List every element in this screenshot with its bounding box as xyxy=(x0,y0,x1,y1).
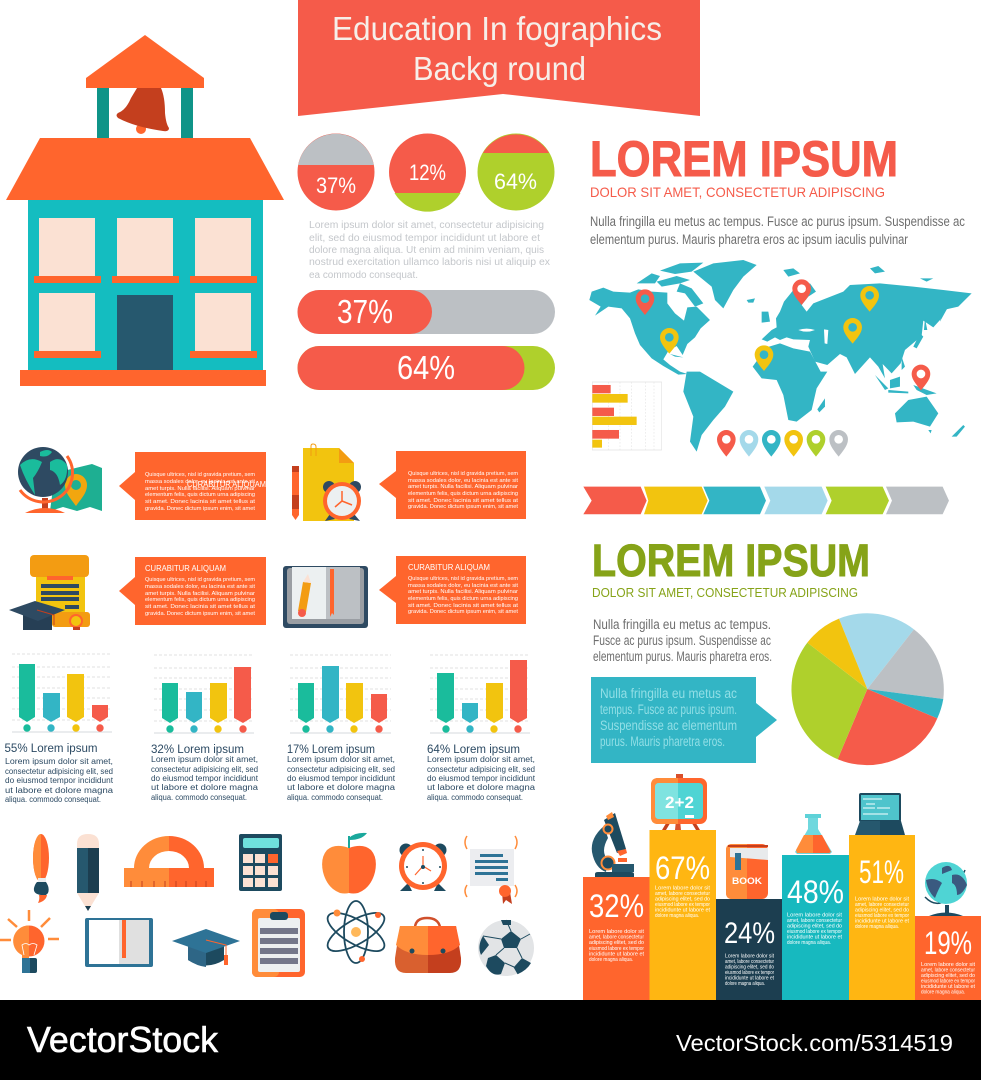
icon: calculator xyxy=(239,834,282,891)
icon: desk globe xyxy=(925,862,967,916)
icon: open notebook with pencil xyxy=(283,566,368,628)
footer: watermark bar: VectorStock xyxy=(27,1019,219,1060)
text block: pie intro: elementum purus. Mauris pharetra eros. xyxy=(593,649,772,664)
caption: 55% lorem ipsum: Lorem ipsum dolor sit amet, xyxy=(5,757,113,766)
callout: curabitur 3: CURABITUR ALIQUAM xyxy=(145,563,226,573)
caption: 55% lorem ipsum: 55% Lorem ipsum xyxy=(4,743,98,755)
callout: curabitur 2: Quisque ultrices, nisl id gravida pretium, sem xyxy=(408,471,518,477)
column stat 19%: incididunte ut labore et xyxy=(921,984,975,990)
text block: lorem paragraph: nostrud exercitation ullamco laboris nisi ut aliquip ex xyxy=(309,257,550,268)
column stat 24%: eiusmod labore ex tempor xyxy=(725,970,774,976)
icon: microscope xyxy=(592,812,634,877)
callout: curabitur 1: massa sodales dolor, eu lacinia est ante sit xyxy=(145,479,255,485)
column stat 32% xyxy=(583,877,650,1000)
icon: school bag xyxy=(395,918,461,973)
icon: laptop xyxy=(855,793,905,835)
icon: flask xyxy=(795,814,832,854)
title banner xyxy=(298,0,700,116)
heading: lorem ipsum red: DOLOR SIT AMET, CONSECTETUR ADIPISCING xyxy=(590,184,885,200)
column stat 24%: incididunte ut labore et xyxy=(725,976,774,982)
circle stat 12% xyxy=(389,134,466,212)
caption: 64% lorem ipsum: aliqua. commodo consequat. xyxy=(427,793,523,802)
column stat 19%: dolore magna aliqua. xyxy=(921,990,965,996)
callout: teal note: tempus. Fusce ac purus ipsum. xyxy=(600,702,737,717)
callout: curabitur 3: massa sodales dolor, eu lacinia est ante sit xyxy=(145,584,255,590)
callout: curabitur 1 xyxy=(119,452,266,520)
column stat 32%: amet, labore consectetur xyxy=(589,934,644,940)
text block: pie intro: Fusce ac purus ipsum. Suspendisse ac xyxy=(593,633,771,648)
column stat 24%: dolore magna aliqua. xyxy=(725,981,765,987)
column stat 24%: 24% xyxy=(724,917,775,950)
column stat 24% xyxy=(716,899,782,1000)
column stat 51%: Lorem labore dolor sit xyxy=(855,896,909,902)
column stat 51%: amet, labore consectetur xyxy=(855,902,909,908)
column stat 51%: 51% xyxy=(859,854,904,890)
text block: pie intro: Nulla fringilla eu metus ac tempus. xyxy=(593,617,771,632)
callout: curabitur 4: CURABITUR ALIQUAM xyxy=(408,562,490,572)
callout: curabitur 2: amet turpis. Nulla facilisi. Aliquam pulvinar xyxy=(408,484,518,490)
icon: protractor xyxy=(124,836,214,887)
icon: diploma scroll and graduation cap xyxy=(9,555,90,630)
pie chart xyxy=(791,613,944,765)
footer: watermark bar: VectorStock.com/5314519 xyxy=(676,1030,953,1056)
column stat 67%: 67% xyxy=(655,850,710,886)
caption: 32% lorem ipsum: consectetur adipisicing elit, sed xyxy=(151,765,258,774)
callout: teal note: Suspendisse ac elementum xyxy=(600,718,737,733)
caption: 32% lorem ipsum xyxy=(151,744,259,802)
column stat 51%: adipiscing elitet, sed do xyxy=(855,908,909,914)
column stat 67%: dolore magna aliqua. xyxy=(655,913,699,919)
title banner: Education In fographics xyxy=(332,10,662,47)
text block: pie intro xyxy=(593,617,772,664)
circle stat 64%: 64% xyxy=(494,169,537,194)
icon: pencil xyxy=(77,834,99,911)
caption: 32% lorem ipsum: ut labore et dolore magna xyxy=(151,783,259,792)
column stat 48%: dolore magna aliqua. xyxy=(787,940,831,946)
caption: 64% lorem ipsum: 64% Lorem ipsum xyxy=(427,744,520,756)
icon: light bulb xyxy=(0,910,59,973)
icon: soccer ball xyxy=(478,920,534,976)
callout: curabitur 4: massa sodales dolor, eu lacinia est ante sit xyxy=(408,583,518,589)
bar chart 32% xyxy=(154,655,254,733)
title banner: Backg round xyxy=(413,50,586,87)
callout: curabitur 3: gravida. Donec dictum ipsum enim, sit amet xyxy=(145,611,255,617)
icon: map pins xyxy=(636,279,930,390)
column stat 48%: amet, labore consectetur xyxy=(787,918,842,924)
progress bar 37%: 37% xyxy=(337,293,393,330)
column stat 67%: amet, labore consectetur xyxy=(655,891,710,897)
caption: 55% lorem ipsum: ut labore et dolore magna xyxy=(5,786,114,795)
circle stat 37% xyxy=(298,134,374,210)
icon: graduation cap xyxy=(172,929,240,967)
heading: lorem ipsum green: LOREM IPSUM xyxy=(592,535,870,586)
caption: 55% lorem ipsum: do eiusmod tempor incididunt xyxy=(5,776,114,785)
progress bar 64% xyxy=(298,346,555,390)
column stat 48%: eiusmod labore ex tempor xyxy=(787,929,842,935)
caption: 55% lorem ipsum: consectetur adipisicing elit, sed xyxy=(5,767,113,776)
column stat 51% xyxy=(849,835,915,1000)
callout: curabitur 2: sit amet. Donec lacinia sit amet tellus at xyxy=(408,498,519,504)
footer: watermark bar xyxy=(0,1000,981,1080)
column stat 51%: eiusmod labore ex tempor xyxy=(855,913,909,919)
caption: 17% lorem ipsum: aliqua. commodo consequat. xyxy=(287,793,383,802)
callout: curabitur 2: elementum felis, quis dictum urna adipiscing xyxy=(408,491,518,497)
column stat 32%: adipiscing elitet, sed do xyxy=(589,940,644,946)
caption: 32% lorem ipsum: aliqua. commodo consequat. xyxy=(151,793,247,802)
callout: curabitur 1: elementum felis, quis dictum urna adipiscing xyxy=(145,492,255,498)
icon: open book xyxy=(85,918,153,967)
column stat 19%: Lorem labore dolor sit xyxy=(921,962,975,968)
callout: curabitur 4: sit amet. Donec lacinia sit amet tellus at xyxy=(408,603,519,609)
callout: curabitur 4: Quisque ultrices, nisl id gravida pretium, sem xyxy=(408,576,518,582)
column stat 67%: Lorem labore dolor sit xyxy=(655,886,710,892)
caption: 17% lorem ipsum: Lorem ipsum dolor sit amet, xyxy=(287,755,395,764)
callout: curabitur 1: CURABITUR ALIQUAM xyxy=(187,479,266,489)
callout: curabitur 1: sit amet. Donec lacinia sit amet tellus at xyxy=(145,499,256,505)
circle stat 64% xyxy=(478,134,554,210)
icon: chalkboard 2+2: 2+2 xyxy=(665,793,694,812)
text block: lorem paragraph: dolore magna aliqua. Ut enim ad minim veniam, quis xyxy=(309,245,544,256)
column stat 24%: adipiscing elitet, sed do xyxy=(725,964,774,970)
chevron process strip xyxy=(583,487,949,514)
column stat 67%: incididunte ut labore et xyxy=(655,908,710,914)
icon: book xyxy=(726,844,768,899)
callout: curabitur 3: amet turpis. Nulla facilisi. Aliquam pulvinar xyxy=(145,591,255,597)
callout: teal note xyxy=(591,677,777,763)
callout: curabitur 1: gravida. Donec dictum ipsum enim, sit amet xyxy=(145,506,255,512)
circle stat 37%: 37% xyxy=(316,173,356,198)
callout: curabitur 4: amet turpis. Nulla facilisi. Aliquam pulvinar xyxy=(408,589,518,595)
callout: curabitur 3: elementum felis, quis dictum urna adipiscing xyxy=(145,597,255,603)
column stat 48%: Lorem labore dolor sit xyxy=(787,912,842,918)
caption: 17% lorem ipsum: do eiusmod tempor incididunt xyxy=(287,774,396,783)
column stat 32%: dolore magna aliqua. xyxy=(589,957,633,963)
caption: 17% lorem ipsum: consectetur adipisicing elit, sed xyxy=(287,765,395,774)
icon: atom xyxy=(322,901,390,963)
icon: globe and map xyxy=(18,447,102,513)
bar chart 55% xyxy=(12,654,112,732)
callout: curabitur 1: amet turpis. Nulla facilisi. Aliquam pulvinar xyxy=(145,486,255,492)
icon: pin colour legend xyxy=(717,430,848,457)
text block: map intro xyxy=(590,214,965,247)
icon: apple xyxy=(322,833,376,894)
caption: 64% lorem ipsum: do eiusmod tempor incididunt xyxy=(427,774,536,783)
icon: book: BOOK xyxy=(732,876,762,887)
icon: paint brush xyxy=(33,834,49,903)
callout: curabitur 4 xyxy=(379,556,526,624)
column stat 48%: adipiscing elitet, sed do xyxy=(787,924,842,930)
column stat 24%: amet, labore consectetur xyxy=(725,959,774,965)
caption: 17% lorem ipsum: 17% Lorem ipsum xyxy=(287,744,375,756)
caption: 55% lorem ipsum xyxy=(4,743,114,804)
callout: curabitur 4: elementum felis, quis dictum urna adipiscing xyxy=(408,596,518,602)
column stat 67%: eiusmod labore ex tempor xyxy=(655,902,710,908)
bar chart 64% xyxy=(430,655,530,733)
column stat 51%: incididunte ut labore et xyxy=(855,918,909,924)
caption: 17% lorem ipsum: ut labore et dolore magna xyxy=(287,783,396,792)
caption: 32% lorem ipsum: 32% Lorem ipsum xyxy=(151,744,244,756)
bar chart 17% xyxy=(290,655,391,733)
circle stat 12%: 12% xyxy=(409,160,446,185)
column stat 19%: adipiscing elitet, sed do xyxy=(921,973,975,979)
icon: document, pen and alarm clock xyxy=(292,444,361,521)
text block: lorem paragraph: ea commodo consequat. xyxy=(309,270,418,281)
column stat 19%: amet, labore consectetur xyxy=(921,968,975,974)
heading: lorem ipsum red: LOREM IPSUM xyxy=(590,131,898,187)
caption: 64% lorem ipsum: Lorem ipsum dolor sit amet, xyxy=(427,755,535,764)
caption: 32% lorem ipsum: do eiusmod tempor incididunt xyxy=(151,774,259,783)
icon: alarm clock xyxy=(399,842,447,891)
callout: curabitur 2: massa sodales dolor, eu lacinia est ante sit xyxy=(408,478,518,484)
column stat 67%: adipiscing elitet, sed do xyxy=(655,896,710,902)
callout: curabitur 3 xyxy=(119,557,266,625)
column stat 32%: incididunte ut labore et xyxy=(589,952,644,958)
caption: 32% lorem ipsum: Lorem ipsum dolor sit amet, xyxy=(151,755,258,764)
text block: lorem paragraph xyxy=(309,220,550,281)
icon: chalkboard 2+2 xyxy=(651,774,707,830)
small horizontal bar chart xyxy=(592,382,662,450)
text block: lorem paragraph: elit, sed do eiusmod tempor incididunt ut labore et xyxy=(309,233,540,244)
callout: curabitur 1: Quisque ultrices, nisl id gravida pretium, sem xyxy=(145,472,255,478)
column stat 67% xyxy=(650,830,716,1000)
heading: lorem ipsum green: DOLOR SIT AMET, CONSECTETUR ADIPISCING xyxy=(592,585,858,600)
text block: map intro: elementum purus. Mauris pharetra eros ac ipsum iaculis pulvinar xyxy=(590,232,908,247)
column stat 32%: Lorem labore dolor sit xyxy=(589,929,644,935)
callout: curabitur 3: Quisque ultrices, nisl id gravida pretium, sem xyxy=(145,577,255,583)
callout: teal note: purus. Mauris pharetra eros. xyxy=(600,734,725,749)
caption: 17% lorem ipsum xyxy=(287,744,396,802)
icon: certificate xyxy=(465,836,517,904)
column stat 24%: Lorem labore dolor sit xyxy=(725,954,774,960)
callout: teal note: Nulla fringilla eu metus ac xyxy=(600,686,737,701)
world map with pins xyxy=(589,260,972,457)
icon: school building xyxy=(6,35,284,386)
callout: curabitur 2: gravida. Donec dictum ipsum enim, sit amet xyxy=(408,504,518,510)
caption: 64% lorem ipsum: consectetur adipisicing elit, sed xyxy=(427,765,535,774)
column stat 19% xyxy=(915,916,981,1000)
progress bar 37% xyxy=(298,290,555,334)
caption: 64% lorem ipsum: ut labore et dolore magna xyxy=(427,783,536,792)
column stat 48%: incididunte ut labore et xyxy=(787,934,842,940)
caption: 55% lorem ipsum: aliqua. commodo consequat. xyxy=(5,795,101,804)
callout: curabitur 2 xyxy=(379,451,526,519)
column stat 48% xyxy=(782,855,849,1000)
text block: lorem paragraph: Lorem ipsum dolor sit amet, consectetur adipisicing xyxy=(309,220,544,231)
progress bar 64%: 64% xyxy=(397,349,455,386)
icon: clipboard xyxy=(252,909,305,977)
callout: curabitur 3: sit amet. Donec lacinia sit amet tellus at xyxy=(145,604,256,610)
caption: 64% lorem ipsum xyxy=(427,744,536,802)
callout: curabitur 4: gravida. Donec dictum ipsum enim, sit amet xyxy=(408,609,518,615)
column stat 48%: 48% xyxy=(787,874,844,910)
column stat 32%: eiusmod labore ex tempor xyxy=(589,946,644,952)
column stat 51%: dolore magna aliqua. xyxy=(855,924,899,930)
column stat 32%: 32% xyxy=(589,888,644,924)
